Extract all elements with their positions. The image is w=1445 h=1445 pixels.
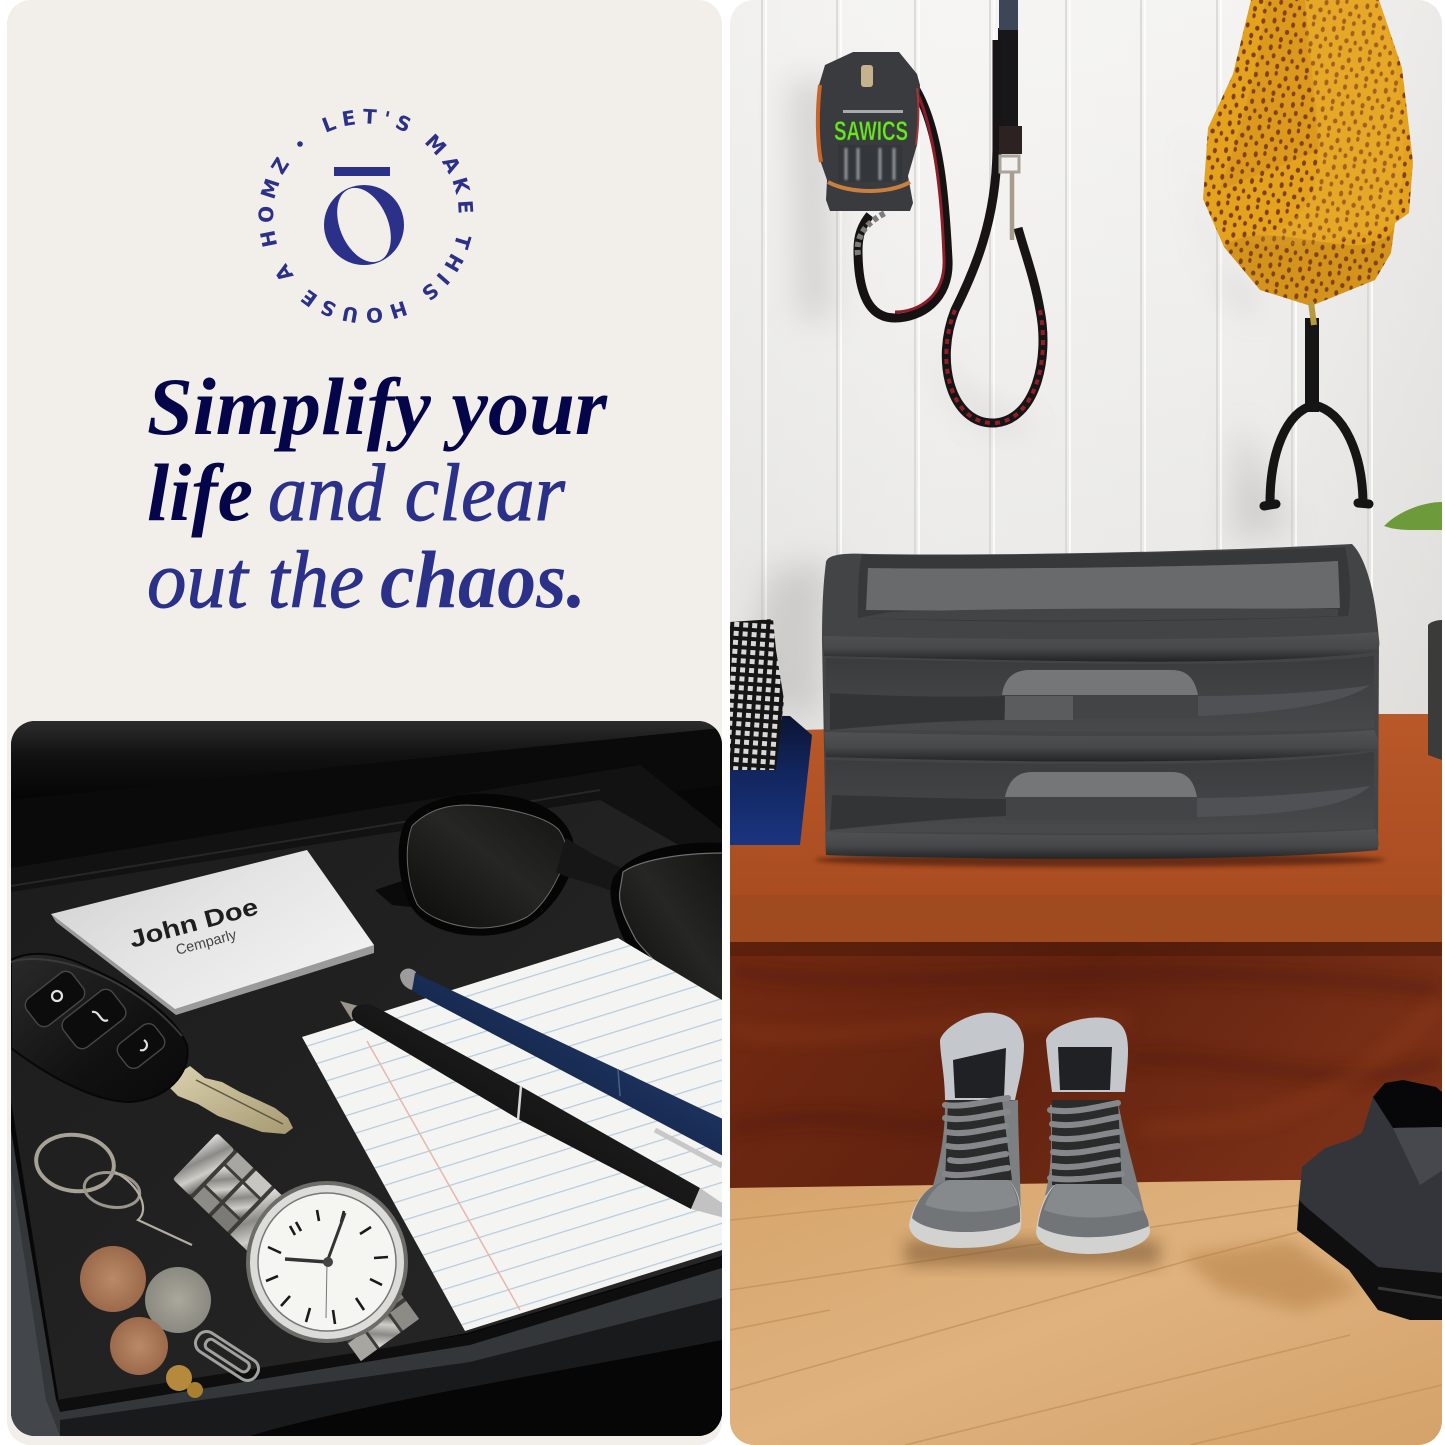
watch hands — [285, 1259, 327, 1262]
storage drawer unit — [815, 544, 1385, 867]
key blade — [170, 1066, 293, 1134]
boot opening — [1373, 1080, 1443, 1128]
panel: photo of entryway — [730, 0, 1443, 1445]
lower drawer front — [826, 752, 1374, 833]
drawer lid — [11, 721, 716, 764]
key rings — [32, 1130, 192, 1245]
blue pen — [400, 968, 725, 1166]
watch upper bracelet — [173, 1133, 282, 1250]
logo dot — [297, 141, 303, 147]
key fob buttons — [22, 968, 168, 1072]
glasses bridge — [556, 838, 622, 892]
floor — [730, 1180, 1442, 1445]
wall shadows — [740, 80, 1290, 720]
bench top — [730, 714, 1442, 897]
hanging leash — [946, 0, 1043, 423]
leash holder — [818, 52, 920, 211]
logo macron bar — [334, 167, 390, 176]
cabinet front — [730, 942, 1442, 1188]
panel: text background — [7, 0, 722, 1445]
wall panel grooves — [761, 0, 1369, 620]
dark boot — [1297, 1080, 1443, 1320]
coins — [80, 1246, 211, 1398]
notepad — [302, 938, 722, 1331]
tray front lip — [11, 1130, 722, 1436]
watch case — [246, 1181, 408, 1343]
paperclip — [194, 1330, 260, 1382]
card subtitle: Cemparly — [174, 927, 239, 959]
right sneaker toe and sole — [1036, 1184, 1150, 1254]
left lens — [399, 794, 575, 936]
boot upper — [1299, 1080, 1443, 1273]
heading line 3: out the — [147, 534, 364, 625]
logo letter o — [324, 180, 404, 270]
key fob body — [11, 954, 188, 1102]
right sneaker ankle — [1045, 1100, 1145, 1215]
lower drawer handle — [1005, 772, 1197, 797]
tray floor — [11, 800, 722, 1408]
sunglasses — [375, 794, 722, 966]
left sneaker ankle — [930, 1100, 1021, 1215]
yellow patterned bag — [1200, 0, 1416, 310]
logo ring text: LET'S MAKE THIS HOUSE A HOMZ — [258, 108, 474, 323]
drawer lip one — [823, 632, 1379, 662]
blue cushion — [730, 715, 812, 845]
card name: John Doe — [127, 893, 261, 954]
watch ticks — [266, 1210, 388, 1324]
heading line 2: life — [147, 447, 253, 538]
bench front edge — [730, 895, 1442, 945]
logo: circular badge — [258, 108, 474, 323]
green leaf — [1384, 502, 1442, 530]
heading line 2: and clear — [268, 447, 566, 538]
panel: photo of drawer contents — [11, 721, 725, 1436]
black wall hook — [1264, 302, 1369, 506]
watch lower bracelet — [346, 1294, 419, 1362]
drawer shadow — [815, 853, 1385, 867]
boot sole — [1297, 1200, 1443, 1320]
black pen — [340, 1001, 725, 1218]
drawer base lip — [825, 829, 1379, 859]
right lens — [610, 842, 722, 958]
left grey sneaker — [909, 1013, 1024, 1248]
left sneaker toe and sole — [909, 1180, 1021, 1248]
leash buckle — [999, 126, 1022, 154]
red leash — [858, 88, 948, 318]
drawer lip two — [824, 730, 1379, 761]
drawer lid recess — [858, 547, 1350, 622]
right side dark object — [1428, 620, 1442, 760]
right grey sneaker — [1036, 1017, 1150, 1254]
top drawer front — [826, 656, 1374, 732]
heading line 3: chaos. — [380, 534, 586, 625]
wristwatch — [173, 1133, 419, 1361]
top drawer handle — [1002, 670, 1198, 695]
business card — [51, 850, 374, 1015]
wall — [730, 0, 1442, 730]
heading line 2 — [147, 447, 566, 538]
car key fob — [11, 954, 293, 1134]
drawer shell — [822, 544, 1379, 858]
heading line 3 — [147, 534, 586, 625]
heading — [147, 361, 608, 625]
checkered cloth — [730, 619, 784, 770]
heading line 1: Simplify your — [147, 361, 608, 452]
holder green label: SAWICS — [834, 116, 908, 146]
